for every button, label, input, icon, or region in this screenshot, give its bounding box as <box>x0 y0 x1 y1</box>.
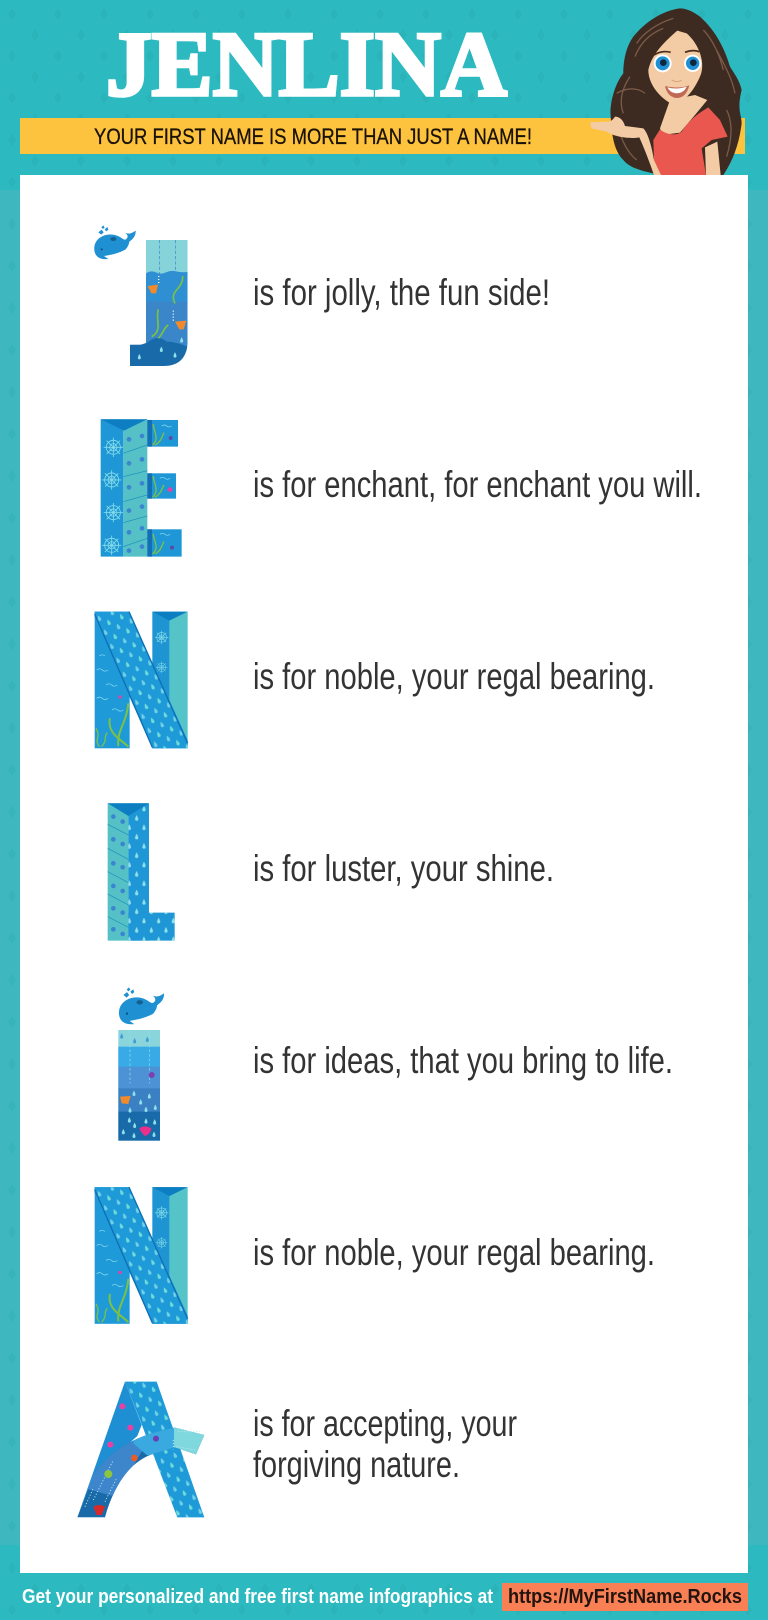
letter E <box>101 419 182 557</box>
letter row: E <box>101 419 702 557</box>
footer text: Get your personalized and free first name infographics at <box>22 1586 493 1608</box>
tagline: YOUR FIRST NAME IS MORE THAN JUST A NAME! <box>94 124 532 149</box>
letter row: A <box>73 1382 517 1523</box>
letter I <box>118 1030 160 1141</box>
letter J <box>127 240 190 367</box>
letter row: L <box>108 803 554 941</box>
letter row: N <box>95 612 655 748</box>
text: A: is for accepting, your <box>253 1403 517 1444</box>
letter N <box>95 1187 188 1324</box>
illustration: woman presenter <box>590 8 742 175</box>
letter row: N second <box>95 1187 655 1324</box>
letter row: J <box>94 225 550 367</box>
text: A <box>253 1403 517 1485</box>
text: J: is for jolly, the fun side! <box>253 272 550 313</box>
title: JENLINA <box>106 13 507 115</box>
icon: whale <box>94 225 136 259</box>
letter L <box>108 803 175 941</box>
letter A <box>73 1382 207 1523</box>
text: N: is for noble, your regal bearing. <box>253 656 655 697</box>
text: A: forgiving nature. <box>253 1444 460 1485</box>
text: N second: is for noble, your regal bearing. <box>253 1232 655 1273</box>
text: L: is for luster, your shine. <box>253 848 554 889</box>
icon: whale <box>119 987 164 1024</box>
letter N <box>95 612 188 748</box>
banner <box>20 118 745 154</box>
footer url button: https://MyFirstName.Rocks <box>508 1586 742 1608</box>
letter row: I <box>118 987 673 1141</box>
